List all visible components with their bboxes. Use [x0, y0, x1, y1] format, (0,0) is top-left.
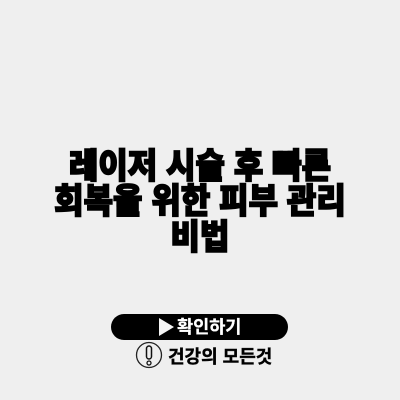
title: 레이저 시술 후 빠른: [69, 147, 331, 185]
title: 비법: [171, 217, 229, 256]
icon: exclamation circle: [136, 342, 162, 368]
button label: 확인하기: [177, 317, 241, 337]
brand row: [136, 342, 272, 368]
title: 회복을 위한 피부 관리: [54, 182, 346, 220]
title: [54, 147, 346, 256]
button: confirm: [111, 314, 288, 340]
brand name: 건강의 모든것: [168, 347, 272, 367]
icon: play triangle: [159, 318, 174, 336]
